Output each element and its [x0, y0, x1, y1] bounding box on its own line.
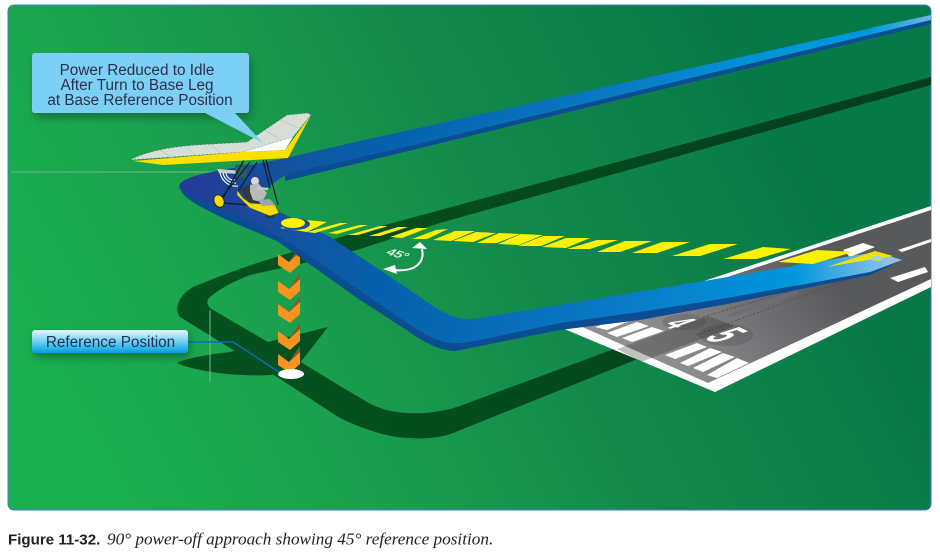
horizontal horizon line: [11, 172, 214, 173]
callout text: at Base Reference Position: [47, 92, 233, 109]
runway shadow overlay: [617, 316, 735, 362]
trike and glider: [130, 113, 311, 218]
struts: [220, 160, 278, 205]
white reference position marker: [278, 369, 304, 379]
wing surface: [130, 113, 311, 160]
downwind ribbon light end: [870, 15, 931, 34]
callout: power reduced: [32, 53, 263, 143]
rear wheel: [265, 214, 275, 218]
callout shadow: [34, 58, 251, 118]
final ribbon light end: [795, 252, 902, 286]
callout text: Power Reduced to Idle: [60, 62, 214, 79]
yellow base position circle: [281, 218, 305, 228]
downwind dark side: [285, 20, 931, 181]
runway: 4: [654, 314, 706, 332]
figure caption: Figure 11-32.: [8, 532, 100, 548]
runway number shadow patches: [662, 314, 753, 346]
blue gap in base position mark: [280, 218, 310, 230]
runway: 5: [692, 323, 760, 347]
leader line to reference position: [186, 342, 279, 372]
45 degree arc arrow: [383, 242, 427, 274]
sound arcs: [220, 169, 238, 186]
nose wheel: [213, 194, 225, 208]
yellow 45 degree dashed line: [307, 223, 853, 264]
callout text: After Turn to Base Leg: [60, 77, 214, 94]
base and final dark side: [181, 185, 902, 351]
engine: [235, 164, 247, 178]
pilot: [250, 177, 275, 206]
scene: traffic pattern illustration: [11, 15, 931, 438]
flight path ribbon: [179, 15, 931, 351]
wing shadow on ground: [177, 327, 328, 375]
pod seat: [240, 184, 260, 204]
label shadow: [34, 334, 190, 358]
yellow arrow on final ribbon tip: [827, 251, 893, 267]
wing ribs: [160, 120, 298, 158]
label text: Reference Position: [46, 334, 175, 351]
wing yellow trailing edge: [133, 115, 311, 165]
runway: [562, 206, 931, 392]
wing white strip: [243, 137, 293, 152]
pale circle on final ribbon tip: [871, 256, 883, 260]
ribbon top surface: [179, 15, 931, 343]
orange chevron column: [278, 254, 300, 370]
45 degree arc arrow: 45°: [383, 246, 413, 262]
vertical reference line: [210, 310, 211, 382]
pod: [237, 190, 279, 216]
callout box: [32, 53, 263, 143]
callout: reference position: [32, 330, 190, 358]
propeller: [217, 169, 236, 174]
ground track shadow: [177, 77, 931, 438]
label box: [32, 330, 188, 353]
runway faint edge guide lines: [697, 280, 848, 336]
figure caption: 90° power-off approach showing 45° reference position.: [107, 530, 493, 548]
yellow base position mark: [280, 220, 327, 232]
